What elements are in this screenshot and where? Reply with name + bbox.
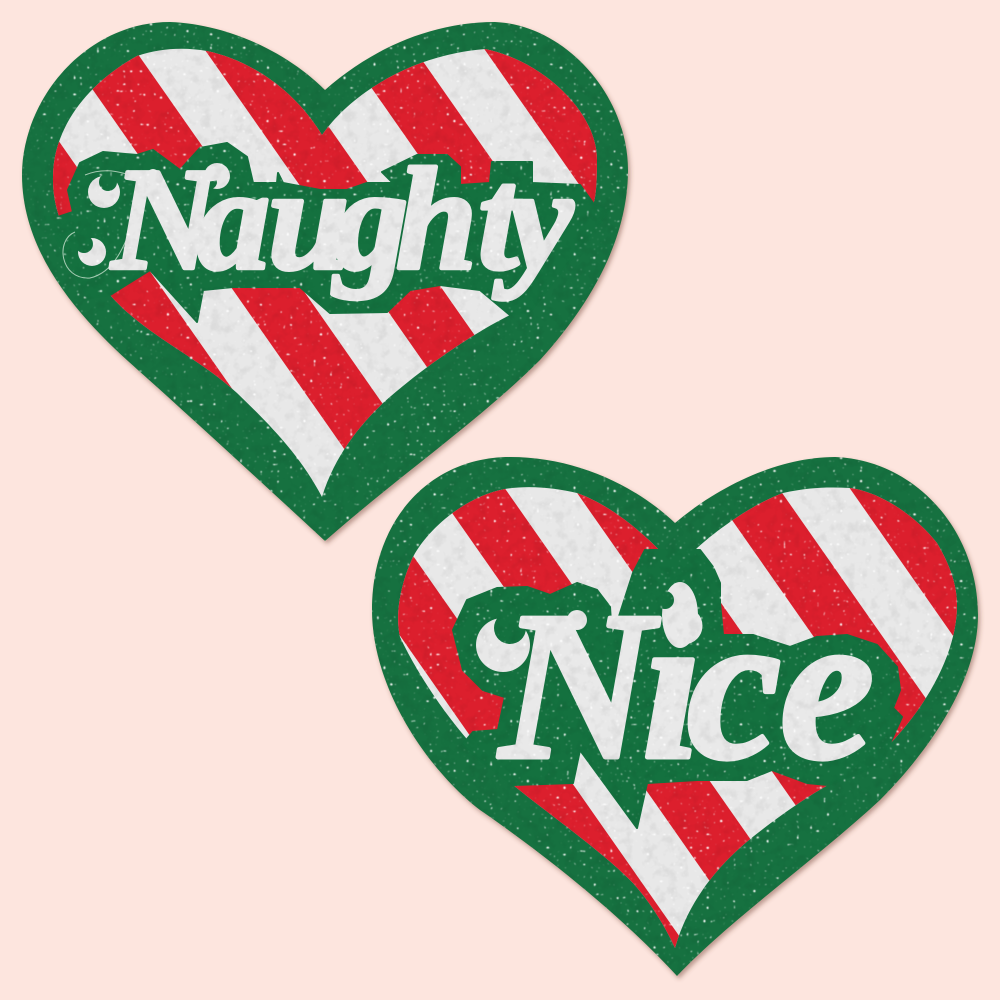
flourish: curl cut-outs — [75, 173, 217, 253]
letters: Naughty — [110, 138, 574, 300]
word: Naughty — [63, 138, 574, 300]
heart outline — [22, 22, 628, 541]
heart outline — [372, 457, 978, 976]
flourish: N curls — [78, 163, 230, 266]
lettering backing band — [453, 550, 902, 828]
candy stripes — [398, 487, 957, 948]
flourish: curl cut-outs — [494, 591, 674, 644]
glitter — [360, 450, 990, 980]
letters: Nice — [498, 568, 874, 803]
flourish: N curl and i dot — [476, 582, 698, 672]
heart: Naughty — [21, 22, 633, 546]
flourish: hairlines — [63, 171, 150, 278]
heart: Nice — [371, 457, 983, 980]
glitter — [22, 22, 628, 541]
lettering backing band — [45, 143, 610, 322]
word: Nice — [476, 568, 874, 803]
candy stripes — [52, 48, 597, 497]
